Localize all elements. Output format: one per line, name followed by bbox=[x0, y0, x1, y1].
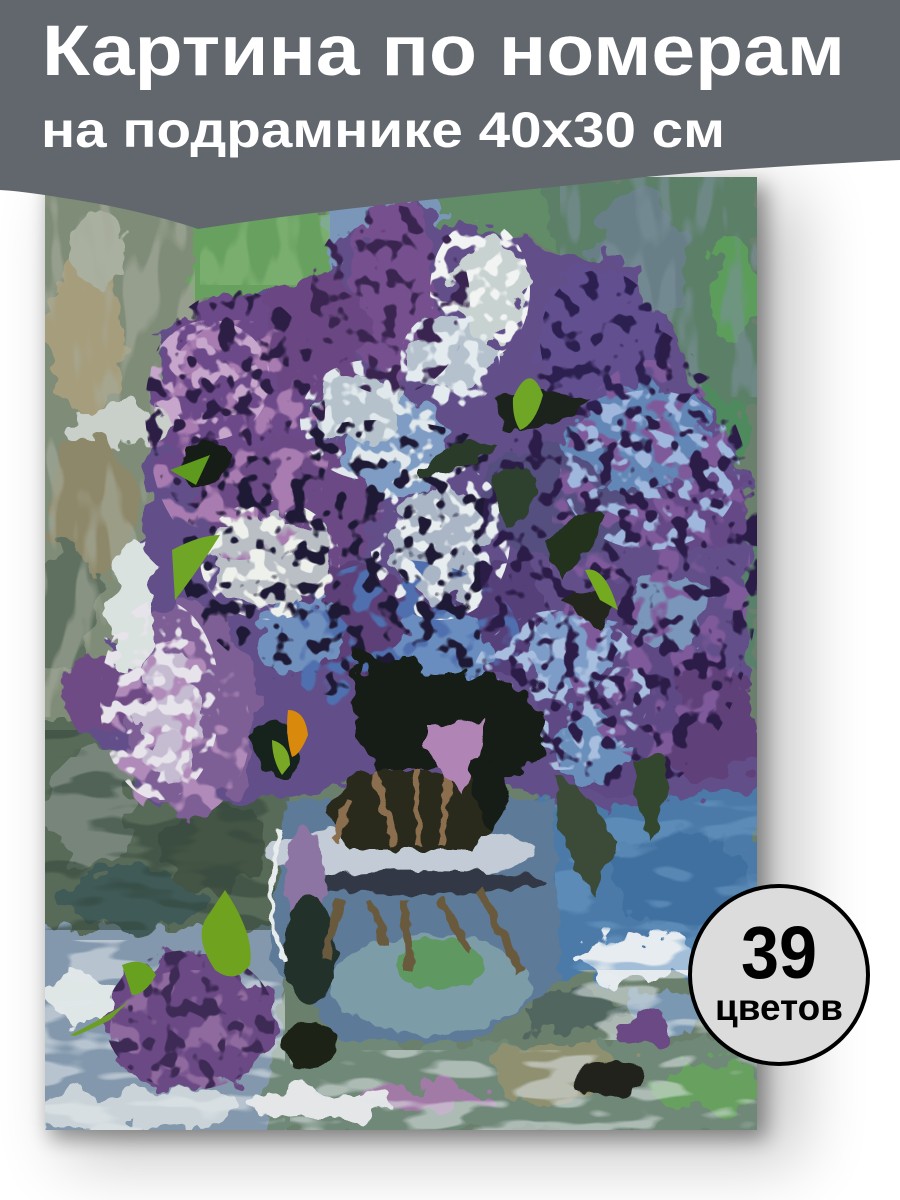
painting: lilac bouquet in a glass vase bbox=[30, 170, 770, 1140]
badge: 39 colours: 39 bbox=[741, 911, 817, 994]
painting background bbox=[30, 170, 770, 1140]
bright green and orange leaves bbox=[70, 378, 618, 1036]
subtitle: на подрамнике 40х30 см bbox=[41, 102, 725, 158]
title: Картина по номерам bbox=[42, 12, 845, 91]
top banner bbox=[0, 0, 900, 229]
flower petal mottling bbox=[110, 320, 750, 1090]
glass vase bbox=[265, 800, 560, 1040]
painting background brush strokes bbox=[45, 177, 757, 717]
dark leaves and stems bbox=[350, 650, 545, 785]
flower masses bbox=[60, 205, 758, 1090]
badge: 39 colours bbox=[690, 886, 868, 1064]
badge: 39 colours: цветов bbox=[715, 987, 843, 1028]
canvas drop shadow bbox=[50, 185, 800, 1160]
